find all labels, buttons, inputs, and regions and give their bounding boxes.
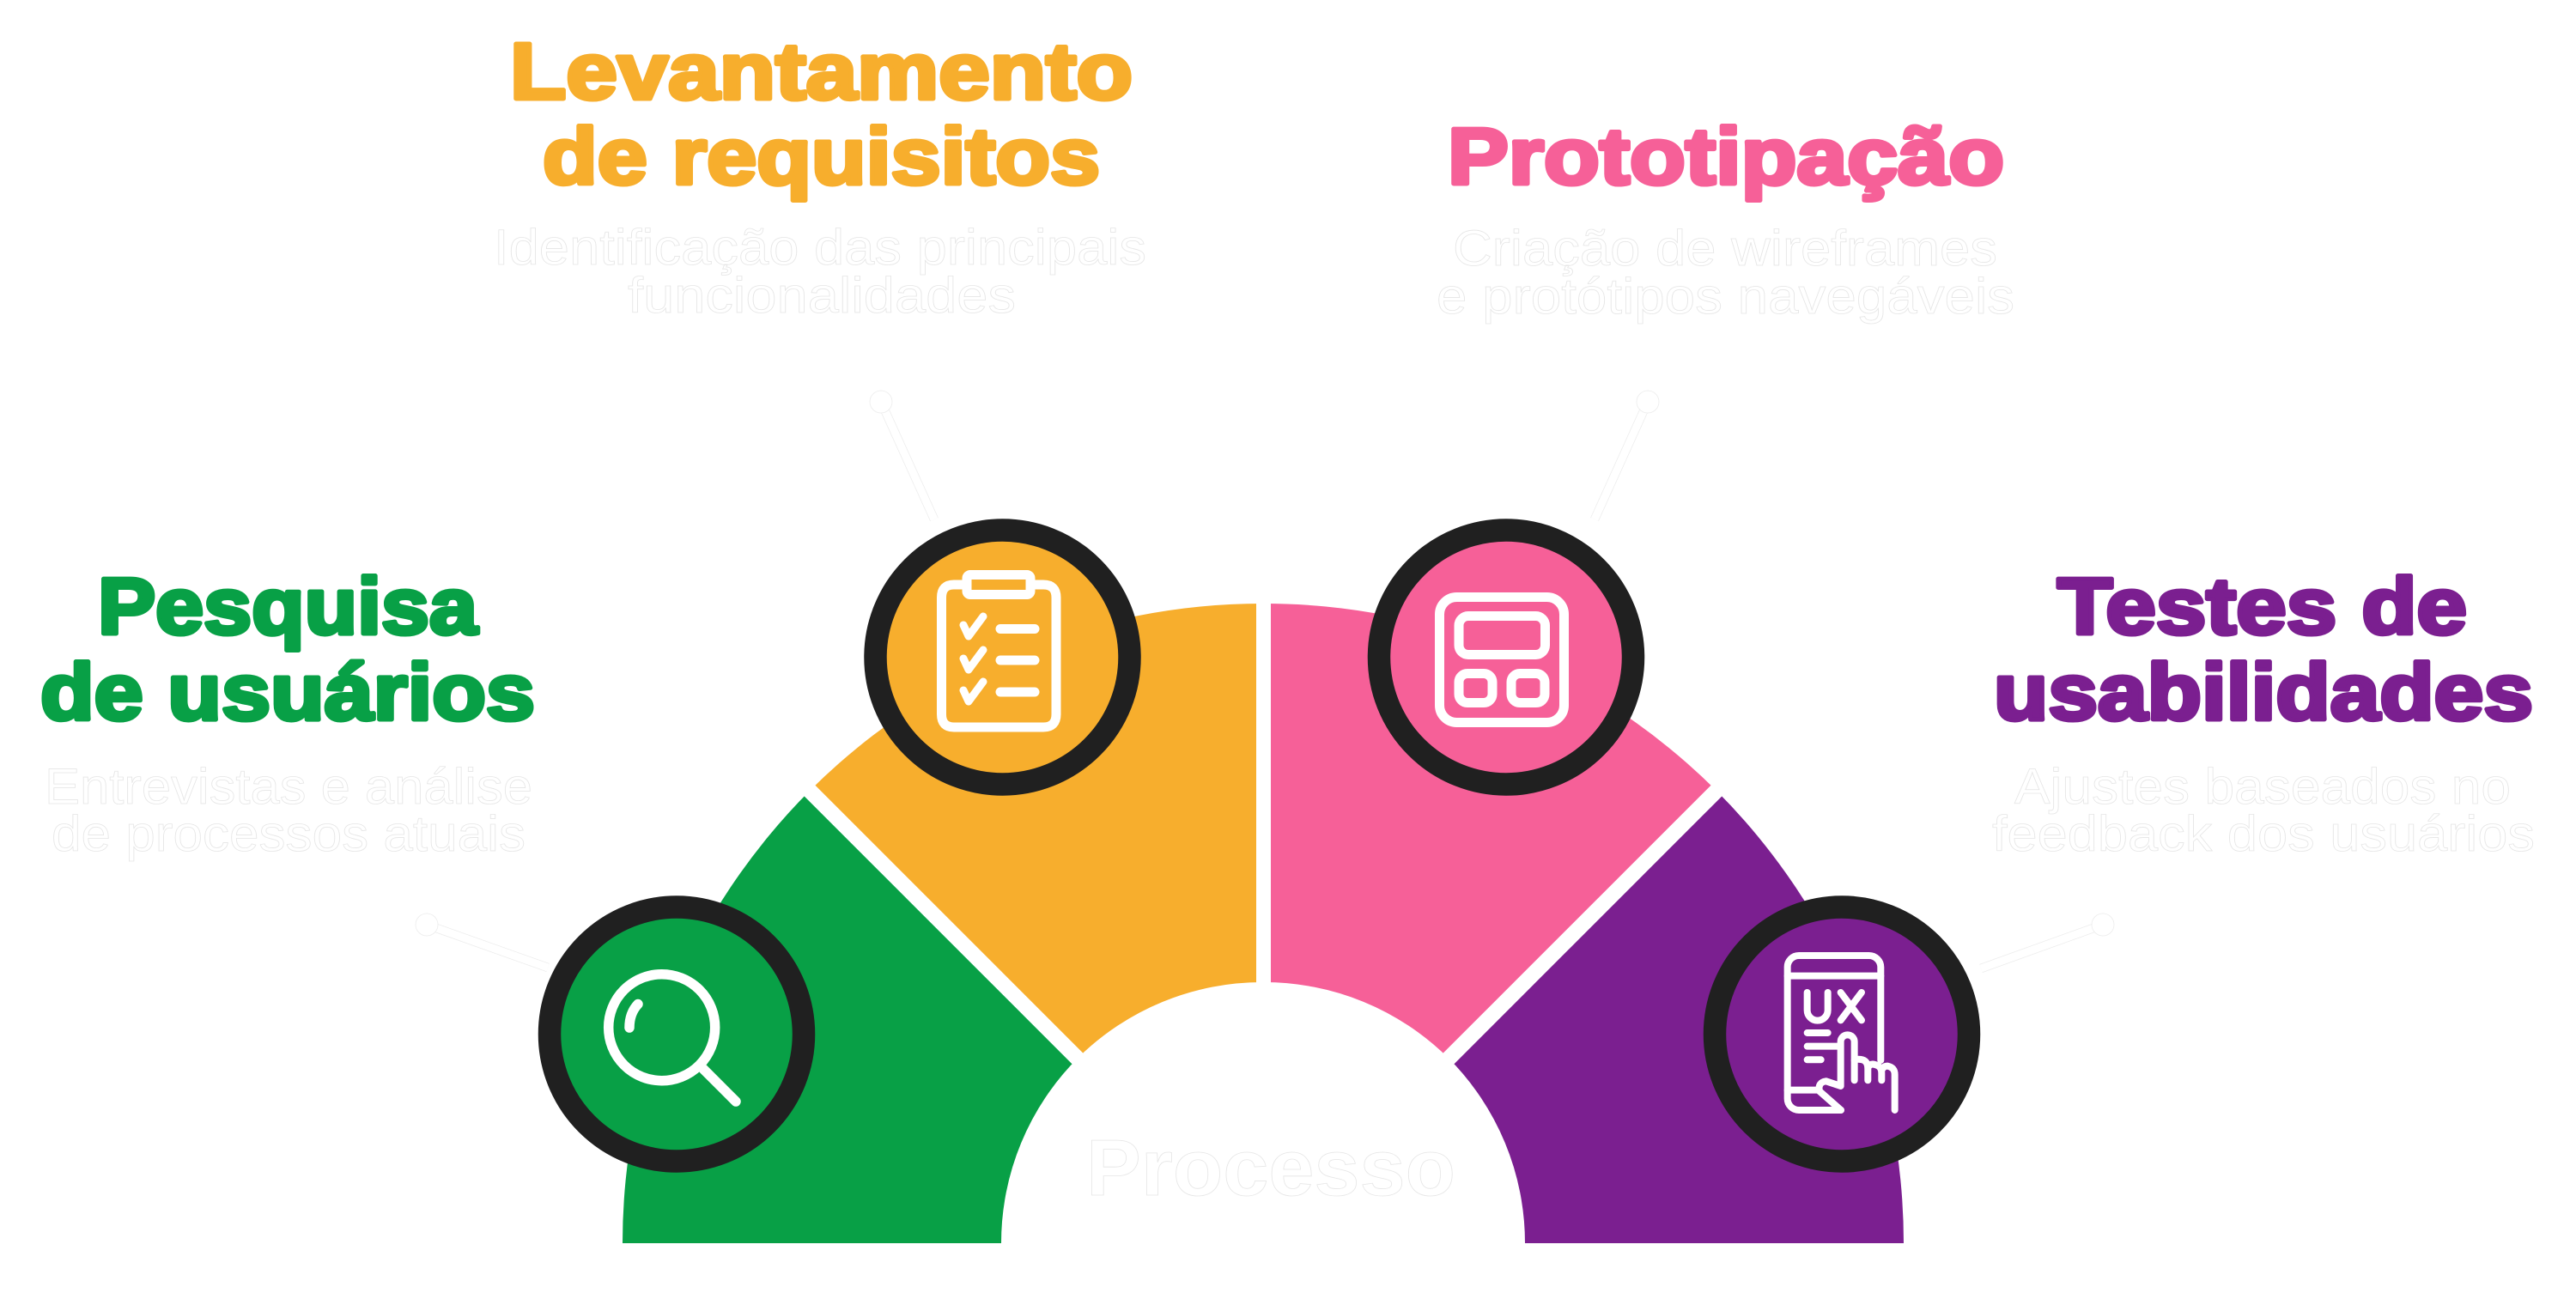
heading: Testes de usabilidades	[1994, 561, 2533, 737]
icon badge: calculator	[1379, 531, 1633, 785]
icon badge: ux phone	[1715, 907, 1969, 1161]
icon: wireframe layout	[1439, 598, 1564, 723]
text block: pesquisa description: Entrevistas e análise	[45, 759, 532, 815]
heading: Prototipação: Prototipação	[1448, 112, 2004, 201]
heading: Testes de usabilidades: Testes de	[2057, 561, 2467, 651]
heading: Pesquisa de usuários	[40, 561, 535, 737]
text block: testes description	[1992, 759, 2535, 862]
icon: UX phone with hand	[1788, 956, 1895, 1110]
heading: Levantamento de requisitos: Levantamento	[510, 27, 1133, 116]
text block: levantamento description	[494, 220, 1146, 324]
connector: prototipacao	[1595, 391, 1659, 519]
heading: Pesquisa de usuários: Pesquisa	[98, 561, 478, 651]
connector: levantamento	[870, 391, 934, 519]
text block: prototipacao description: e protótipos navegáveis	[1437, 269, 2014, 325]
segment: purple	[1449, 790, 1904, 1243]
icon: checklist clipboard	[941, 575, 1056, 727]
icon badge: clipboard	[876, 531, 1130, 785]
center label: Processo: Processo	[1086, 1123, 1455, 1212]
heading: Levantamento de requisitos	[510, 27, 1133, 201]
heading: Testes de usabilidades: usabilidades	[1994, 647, 2533, 737]
text block: levantamento description: funcionalidades	[628, 268, 1016, 324]
text block: testes description: feedback dos usuários	[1992, 806, 2535, 862]
text block: levantamento description: Identificação das principais	[494, 220, 1146, 276]
segment: pink	[1263, 604, 1716, 1058]
text block: testes description: Ajustes baseados no	[2014, 759, 2511, 815]
icon badge: magnifier	[550, 907, 804, 1161]
heading: Pesquisa de usuários: de usuários	[40, 647, 535, 737]
text block: pesquisa description	[45, 759, 532, 862]
semicircle chart: process	[623, 592, 1904, 1243]
text block: pesquisa description: de processos atuais	[52, 806, 526, 862]
icon: magnifying glass	[609, 974, 736, 1102]
segment: orange	[811, 604, 1263, 1058]
segment: green	[623, 790, 1078, 1243]
text block: prototipacao description	[1437, 221, 2014, 325]
connector: testes	[1981, 914, 2114, 968]
connector: pesquisa	[416, 914, 548, 968]
text block: prototipacao description: Criação de wireframes	[1453, 221, 1997, 276]
heading: Levantamento de requisitos: de requisitos	[543, 112, 1100, 201]
